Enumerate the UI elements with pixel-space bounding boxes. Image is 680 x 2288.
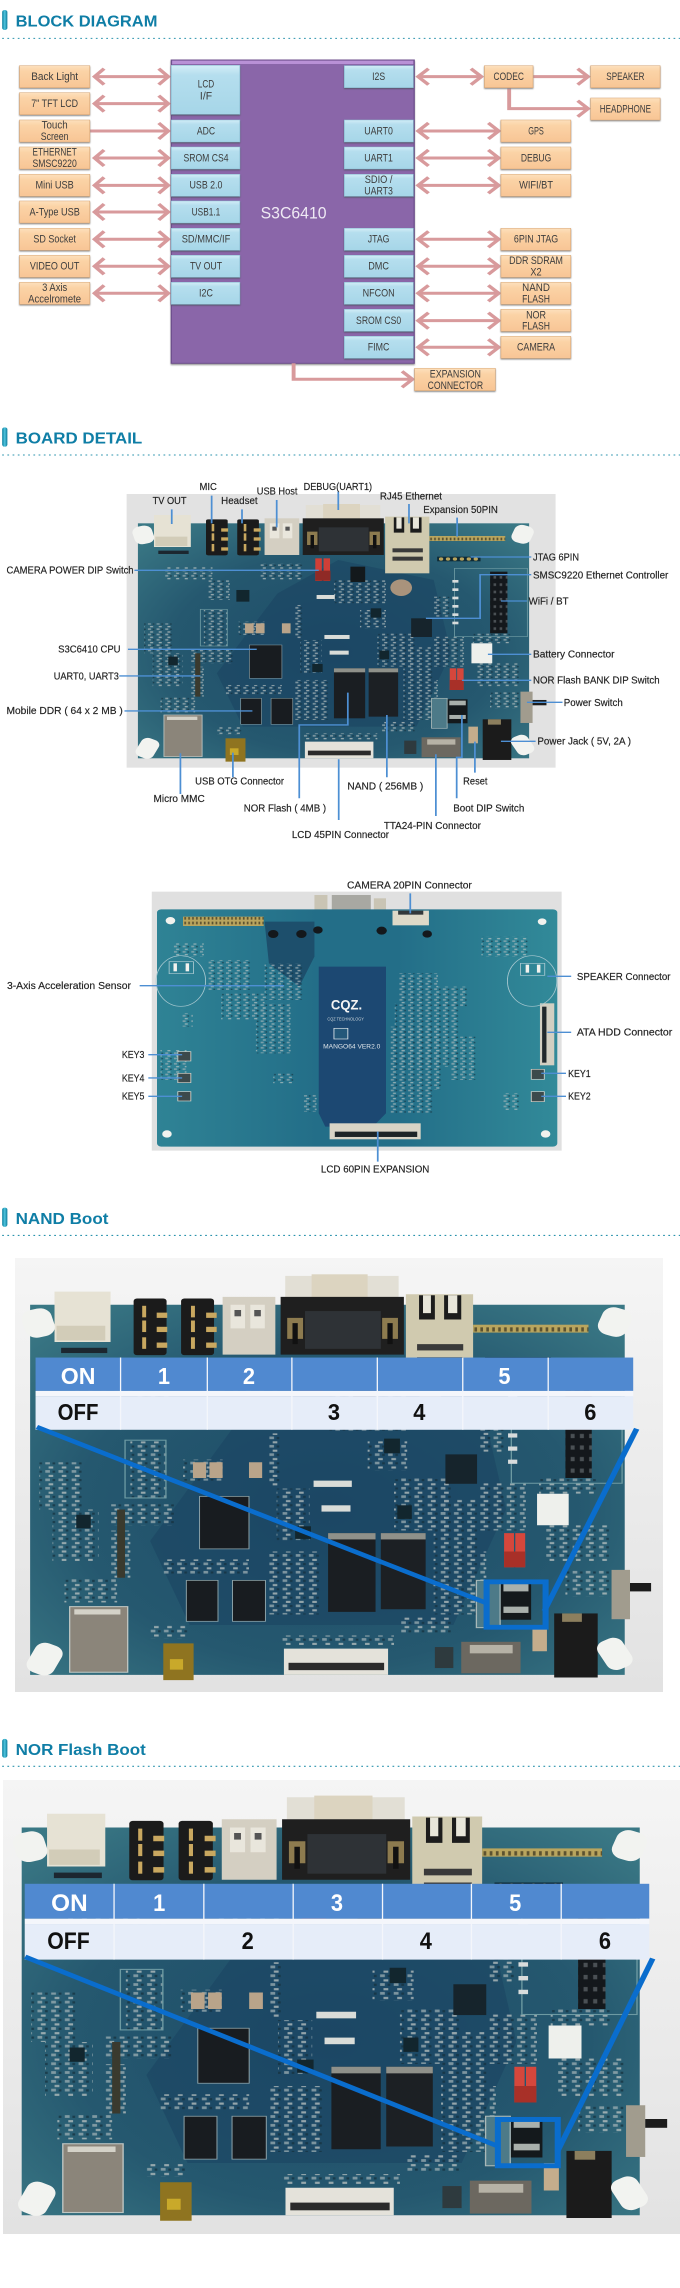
labels: front board: JTAG 6PIN	[533, 552, 579, 563]
labels: front board: NOR Flash ( 4MB )	[244, 803, 326, 814]
boxes: chip left interfaces: TV OUT	[190, 259, 222, 272]
table: NOR DIP switch positions	[25, 1884, 649, 1960]
labels: front board: TTA24-PIN Connector	[384, 820, 481, 832]
section: board back	[7, 880, 672, 1175]
labels: front board: TV OUT	[153, 495, 186, 507]
boxes: right peripherals: EXPANSION	[430, 367, 481, 380]
heading: NAND boot	[2, 1208, 108, 1228]
boxes: chip left interfaces: SROM CS4	[183, 151, 229, 164]
callout: boot DIP switch	[37, 1427, 637, 1627]
table: NAND DIP switch positions: ON	[61, 1363, 95, 1389]
table: NOR DIP switch positions: 5	[509, 1889, 521, 1916]
labels: back board: KEY5	[122, 1091, 144, 1102]
table: NOR DIP switch positions: 4	[420, 1927, 432, 1954]
labels: back board: KEY3	[122, 1049, 144, 1061]
photo: NOR boot board	[3, 1780, 680, 2234]
labels: front board: USB Host	[257, 486, 298, 497]
labels: front board: UART0, UART3	[54, 671, 119, 682]
boxes: right peripherals: WIFI/BT	[519, 178, 553, 191]
boxes: chip right interfaces	[344, 66, 413, 358]
labels: back board: KEY4	[122, 1073, 145, 1084]
table: NAND DIP switch positions: 3	[328, 1399, 340, 1425]
labels: front board: Micro MMC	[154, 793, 205, 805]
table: NOR DIP switch positions: 3	[331, 1889, 343, 1916]
labels: front board: NAND ( 256MB )	[347, 781, 423, 792]
arrows: block connections	[90, 69, 588, 387]
boxes: right peripherals: CONNECTOR	[428, 379, 483, 392]
boxes: chip right interfaces: NFCON	[363, 286, 395, 299]
boxes: left peripherals: ETHERNET	[33, 145, 77, 158]
boxes: right peripherals	[415, 66, 660, 392]
photo: board back: CQZ TECHNOLOGY	[327, 1017, 364, 1022]
labels: front board: DEBUG(UART1)	[304, 481, 372, 493]
table: NAND DIP switch positions: 5	[498, 1363, 511, 1389]
labels: front board: Power Switch	[564, 697, 623, 709]
labels: front board: LCD 45PIN Connector	[292, 829, 389, 841]
callout: boot DIP switch	[25, 1957, 653, 2166]
heading: board detail: BOARD DETAIL	[16, 429, 142, 447]
boxes: right peripherals: SPEAKER	[606, 70, 644, 83]
table: NOR DIP switch positions: ON	[51, 1889, 88, 1916]
boxes: chip left interfaces: I2C	[199, 286, 213, 299]
labels: front board: Power Jack ( 5V, 2A )	[537, 736, 631, 747]
section: NOR flash boot	[2, 1739, 680, 2234]
boxes: left peripherals: 7" TFT LCD	[31, 97, 78, 110]
boxes: right peripherals: CODEC	[494, 70, 524, 83]
labels: back board	[7, 880, 672, 1175]
section: block diagram	[2, 10, 680, 392]
boxes: chip right interfaces: FIMC	[368, 340, 389, 353]
table: NOR DIP switch positions: 1	[153, 1889, 165, 1916]
photo: board back	[152, 892, 562, 1151]
labels: back board: KEY1	[568, 1068, 591, 1080]
table: NOR DIP switch positions: OFF	[47, 1927, 90, 1954]
leader lines: front board	[119, 492, 563, 820]
labels: front board: Battery Connector	[533, 649, 615, 660]
labels: front board: Headset	[221, 495, 258, 507]
boxes: chip left interfaces: USB 2.0	[190, 178, 222, 191]
boxes: chip left interfaces: ADC	[197, 124, 215, 137]
boxes: right peripherals: DEBUG	[521, 151, 551, 164]
boxes: chip right interfaces: UART3	[364, 184, 393, 197]
boxes: right peripherals: 6PIN JTAG	[514, 232, 558, 245]
boxes: left peripherals: VIDEO OUT	[30, 259, 80, 272]
chip: S3C6410: S3C6410	[261, 205, 327, 223]
boxes: right peripherals: CAMERA	[517, 340, 555, 353]
labels: front board	[7, 481, 668, 841]
heading: NOR flash boot: NOR Flash Boot	[16, 1741, 146, 1759]
table: NAND DIP switch positions: OFF	[58, 1399, 98, 1425]
labels: front board: Expansion 50PIN	[423, 504, 498, 516]
boxes: left peripherals: Mini USB	[36, 178, 74, 191]
table: NAND DIP switch positions: 2	[243, 1363, 255, 1389]
boxes: left peripherals	[20, 66, 90, 305]
labels: front board: Reset	[463, 776, 488, 787]
heading: board detail	[2, 427, 142, 447]
table: NAND DIP switch positions: 1	[158, 1363, 170, 1389]
photo: NAND boot board	[15, 1258, 663, 1692]
photo: board front	[127, 494, 556, 768]
boxes: right peripherals: FLASH	[522, 292, 550, 305]
boxes: chip right interfaces: I2S	[372, 70, 385, 83]
heading: block diagram	[2, 10, 157, 30]
labels: front board: USB OTG Connector	[195, 776, 284, 787]
boxes: left peripherals: Back Light	[31, 70, 78, 83]
boxes: left peripherals: Accelromete	[28, 292, 81, 305]
boxes: chip right interfaces: DMC	[368, 259, 389, 272]
boxes: left peripherals: SD Socket	[33, 232, 76, 245]
table: NAND DIP switch positions: 6	[584, 1399, 596, 1425]
heading: block diagram: BLOCK DIAGRAM	[16, 12, 157, 30]
table: NAND DIP switch positions	[36, 1358, 633, 1430]
boxes: chip right interfaces: SDIO /	[365, 173, 393, 186]
boxes: left peripherals: 3 Axis	[42, 281, 67, 294]
labels: back board: KEY2	[568, 1091, 591, 1102]
labels: front board: WiFi / BT	[529, 596, 569, 607]
boxes: chip right interfaces: UART1	[364, 151, 393, 164]
table: NOR DIP switch positions: 2	[242, 1927, 254, 1954]
boxes: left peripherals: SMSC9220	[33, 157, 77, 170]
boxes: right peripherals: FLASH	[522, 319, 550, 332]
boxes: right peripherals: NAND	[522, 281, 550, 294]
section: board detail	[2, 427, 680, 841]
labels: back board: CAMERA 20PIN Connector	[347, 880, 472, 891]
boxes: left peripherals: Touch	[42, 118, 68, 131]
boxes: chip right interfaces: SROM CS0	[356, 314, 401, 327]
photo: board back: MANGO64 VER2.0	[323, 1042, 380, 1050]
table: NOR DIP switch positions: 6	[599, 1927, 611, 1954]
boxes: chip left interfaces: I/F	[200, 89, 212, 102]
labels: front board: Boot DIP Switch	[453, 803, 524, 814]
boxes: chip left interfaces: SD/MMC/IF	[182, 232, 230, 245]
photo: board back: CQZ.	[331, 997, 362, 1013]
boxes: chip left interfaces	[171, 65, 240, 304]
boxes: chip right interfaces: UART0	[364, 124, 393, 137]
labels: front board: MIC	[200, 481, 217, 493]
labels: front board: S3C6410 CPU	[58, 644, 121, 655]
labels: back board: LCD 60PIN EXPANSION	[321, 1164, 429, 1175]
heading: NAND boot: NAND Boot	[16, 1210, 108, 1228]
boxes: right peripherals: X2	[530, 265, 542, 278]
boxes: left peripherals: Screen	[41, 130, 69, 143]
labels: front board: RJ45 Ethernet	[380, 491, 443, 502]
table: NAND DIP switch positions: 4	[413, 1399, 426, 1425]
leader lines: back board	[140, 893, 571, 1162]
labels: front board: Mobile DDR ( 64 x 2 MB )	[7, 705, 123, 717]
labels: back board: 3-Axis Acceleration Sensor	[7, 980, 131, 992]
boxes: left peripherals: A-Type USB	[29, 205, 80, 218]
chip: S3C6410	[171, 60, 414, 363]
boxes: chip left interfaces: USB1.1	[192, 205, 220, 218]
boxes: right peripherals: NOR	[526, 308, 546, 321]
section: NAND boot	[2, 1208, 680, 1692]
labels: front board: CAMERA POWER DIP Switch	[7, 565, 134, 576]
boxes: chip left interfaces: LCD	[198, 77, 214, 90]
boxes: right peripherals: GPS	[528, 124, 544, 137]
boxes: right peripherals: DDR SDRAM	[509, 254, 563, 267]
boxes: chip right interfaces: JTAG	[368, 232, 389, 245]
